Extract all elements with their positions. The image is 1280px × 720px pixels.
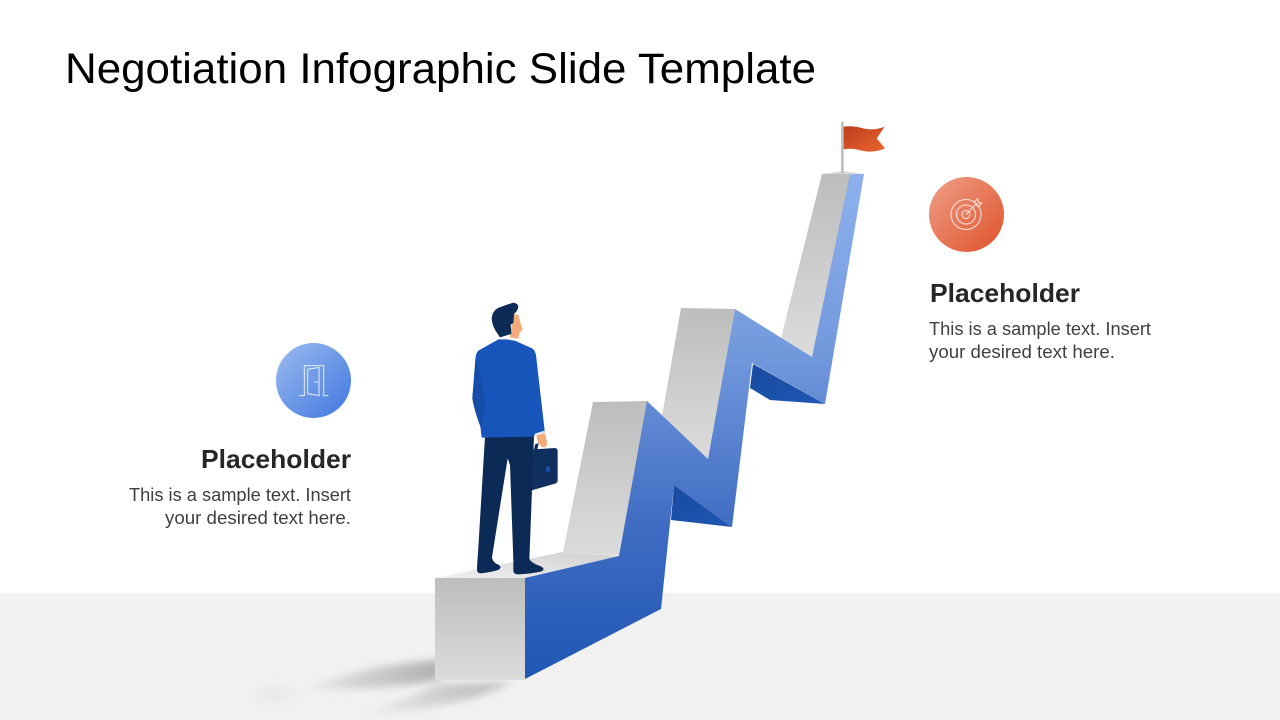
top surface of first step bbox=[435, 552, 619, 578]
floor bbox=[0, 593, 1280, 720]
dark undersides bbox=[671, 364, 825, 527]
pants bbox=[478, 435, 534, 560]
zigzag arrow staircase bbox=[435, 171, 864, 680]
jacket shaded arm bbox=[472, 357, 485, 427]
briefcase bbox=[532, 443, 558, 490]
front grey block bbox=[435, 578, 525, 680]
shoes bbox=[477, 557, 543, 574]
hair bbox=[492, 303, 518, 337]
jacket bbox=[472, 339, 545, 438]
left body text bbox=[129, 485, 351, 528]
face bbox=[510, 314, 523, 339]
right body text: This is a sample text. Insert bbox=[929, 319, 1151, 339]
right body text bbox=[929, 319, 1151, 362]
left heading: Placeholder bbox=[201, 444, 351, 474]
right heading: Placeholder bbox=[930, 278, 1080, 308]
right icon: target bbox=[929, 177, 1004, 252]
top cap bbox=[822, 171, 864, 174]
shirt cuff bbox=[535, 429, 545, 436]
businessman figure bbox=[472, 303, 558, 574]
blue zigzag face bbox=[525, 174, 864, 679]
left body text: This is a sample text. Insert bbox=[129, 485, 351, 505]
title: Negotiation Infographic Slide Template bbox=[65, 45, 816, 93]
collar bbox=[498, 338, 516, 341]
right body text: your desired text here. bbox=[929, 342, 1115, 362]
cast shadows bbox=[255, 660, 513, 715]
flag bbox=[841, 122, 885, 173]
hand bbox=[536, 433, 547, 448]
grey inner walls bbox=[563, 174, 851, 556]
left body text: your desired text here. bbox=[165, 508, 351, 528]
left icon: door bbox=[276, 343, 351, 418]
